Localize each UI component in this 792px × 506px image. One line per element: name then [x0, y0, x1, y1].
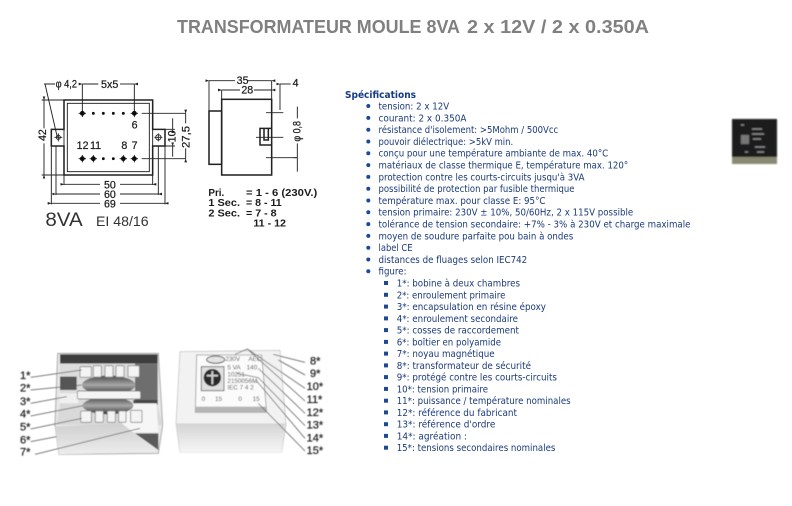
right callouts: 9* — [310, 368, 321, 380]
case markings: AEC — [248, 356, 262, 363]
specification list: tension: 2 x 12V — [378, 102, 450, 112]
specification list: moyen de soudure parfaite pou bain à ondes — [378, 230, 573, 242]
figure legend: 2*: enroulement primaire — [397, 290, 505, 301]
figure legend: 7*: noyau magnétique — [397, 348, 495, 360]
specification list — [378, 102, 691, 278]
dimensions: φ 4,2 — [56, 78, 77, 90]
pin assignment: 11 - 12 — [253, 219, 286, 230]
specification list: température max. pour classe E: 95°C — [378, 195, 546, 207]
sub bullets — [384, 281, 388, 450]
right callouts: 8* — [310, 355, 321, 367]
figure legend: 3*: encapsulation en résine époxy — [397, 301, 546, 313]
pins — [79, 110, 138, 162]
specifications — [345, 89, 691, 454]
case markings: 5 VA — [227, 364, 241, 371]
case markings: 15 — [253, 396, 260, 403]
right callouts: 15* — [307, 445, 324, 457]
figure legend: 13*: référence d'ordre — [397, 419, 495, 431]
specification list: résistance d'isolement: >5Mohm / 500Vcc — [378, 124, 558, 136]
figure legend: 14*: agréation : — [397, 430, 467, 442]
label: 8VA EI 48/16 — [45, 210, 149, 231]
specification list: label CE — [378, 243, 412, 254]
technical drawing: side view — [208, 75, 317, 230]
dimensions — [37, 78, 192, 211]
case markings: 230V — [225, 356, 241, 363]
side outline — [209, 99, 297, 175]
right callouts — [235, 349, 324, 457]
figure legend: 15*: tensions secondaires nominales — [397, 443, 555, 454]
figure legend: 5*: cosses de raccordement — [397, 326, 519, 337]
side dimensions: φ 0,8 — [291, 121, 303, 142]
case markings — [202, 356, 262, 403]
specification list: distances de fluages selon IEC742 — [378, 255, 527, 266]
pin numbers: 12 — [77, 140, 89, 152]
figure legend: 8*: transformateur de sécurité — [397, 360, 531, 372]
pin assignment — [208, 188, 317, 230]
cutaway body — [55, 353, 163, 454]
left callouts: 1* — [20, 370, 31, 382]
case markings: 140 — [247, 364, 258, 371]
figure legend: 6*: boîtier en polyamide — [397, 336, 501, 348]
pin numbers: 8 — [121, 140, 127, 152]
pin assignment: = 8 - 11 — [246, 198, 282, 209]
specification list: conçu pour une température ambiante de max. 40°C — [378, 148, 608, 160]
photo: transformer thumbnail — [732, 119, 777, 164]
right callouts: 10* — [307, 381, 324, 393]
left callouts: 2* — [20, 383, 31, 395]
right callouts: 13* — [307, 420, 324, 432]
main bullets — [366, 104, 370, 273]
case markings: IEC 7 4 2 — [227, 385, 254, 392]
figure legend: 10*: tension primaire — [397, 384, 488, 395]
left callouts: 7* — [20, 447, 31, 459]
dimensions: 5x5 — [101, 79, 118, 91]
technical drawing: front view — [37, 78, 192, 231]
dimensions: 69 — [104, 199, 116, 211]
side dimensions — [209, 75, 303, 172]
figure legend: 12*: référence du fabricant — [397, 407, 517, 419]
left callouts: 4* — [20, 409, 31, 421]
dimensions: 42 — [37, 129, 49, 141]
left callouts — [20, 370, 140, 459]
specification list: tolérance de tension secondaire: +7% - 3% à 230V et charge maximale — [378, 218, 691, 230]
pin assignment: = 7 - 8 — [246, 209, 277, 220]
title: TRANSFORMATEUR MOULE 8VA — [177, 17, 460, 37]
specification list: courant: 2 x 0.350A — [378, 113, 467, 124]
figure legend: 1*: bobine à deux chambres — [397, 278, 520, 290]
specification list: protection contre les courts-circuits jusqu'à 3VA — [378, 171, 585, 183]
pin assignment: 2 Sec. — [208, 209, 240, 220]
heading: Spécifications — [345, 89, 416, 101]
pin assignment: = 1 - 6 (230V.) — [246, 188, 317, 199]
side dimensions: 35 — [237, 75, 249, 87]
photo: transformer cutaway — [20, 349, 324, 459]
specification list: figure: — [378, 267, 406, 278]
specification list: possibilité de protection par fusible thermique — [378, 183, 575, 195]
label: 8VA EI 48/16: EI 48/16 — [96, 213, 149, 229]
specification list: tension primaire: 230V ± 10%, 50/60Hz, 2 x 115V possible — [378, 208, 633, 219]
specification list: pouvoir diélectrique: >5kV min. — [378, 136, 513, 148]
right case — [176, 350, 286, 452]
case markings: 2150056M — [227, 378, 257, 385]
figure legend: 4*: enroulement secondaire — [397, 314, 518, 325]
right callouts: 11* — [307, 394, 323, 406]
case markings: 10251 — [227, 371, 245, 378]
title — [177, 17, 649, 37]
transformer outline — [51, 100, 165, 175]
dimensions: 50 — [104, 179, 116, 191]
figure legend — [397, 278, 571, 454]
side dimensions: 4 — [293, 78, 299, 90]
label: 8VA EI 48/16: 8VA — [45, 210, 83, 231]
case markings: 0 — [238, 396, 242, 403]
dimensions: 60 — [104, 189, 116, 201]
right callouts: 14* — [307, 432, 324, 444]
dimensions: 10 — [166, 130, 178, 142]
specification list: matériaux de classe thermique E, température max. 120° — [378, 160, 628, 172]
pin numbers: 11 — [90, 140, 101, 152]
figure legend: 9*: protégé contre les courts-circuits — [397, 372, 557, 384]
coils — [77, 376, 141, 414]
left callouts: 3* — [20, 396, 31, 408]
logo block — [201, 356, 225, 391]
title: 2 x 12V / 2 x 0.350A — [467, 17, 649, 37]
case markings: 0 — [202, 396, 206, 403]
figure legend: 11*: puissance / température nominales — [397, 395, 571, 407]
side dimensions: 28 — [241, 84, 253, 96]
terminals — [80, 366, 142, 422]
pin numbers — [77, 120, 138, 152]
pin numbers: 7 — [132, 140, 138, 152]
case markings: 15 — [215, 396, 223, 403]
dimensions: 27,5 — [180, 126, 192, 148]
right callouts: 12* — [307, 407, 324, 419]
pin assignment: 1 Sec. — [208, 198, 240, 209]
left callouts: 5* — [20, 422, 31, 434]
pin assignment: Pri. — [208, 188, 225, 199]
left callouts: 6* — [20, 434, 31, 446]
pin numbers: 6 — [132, 120, 138, 132]
